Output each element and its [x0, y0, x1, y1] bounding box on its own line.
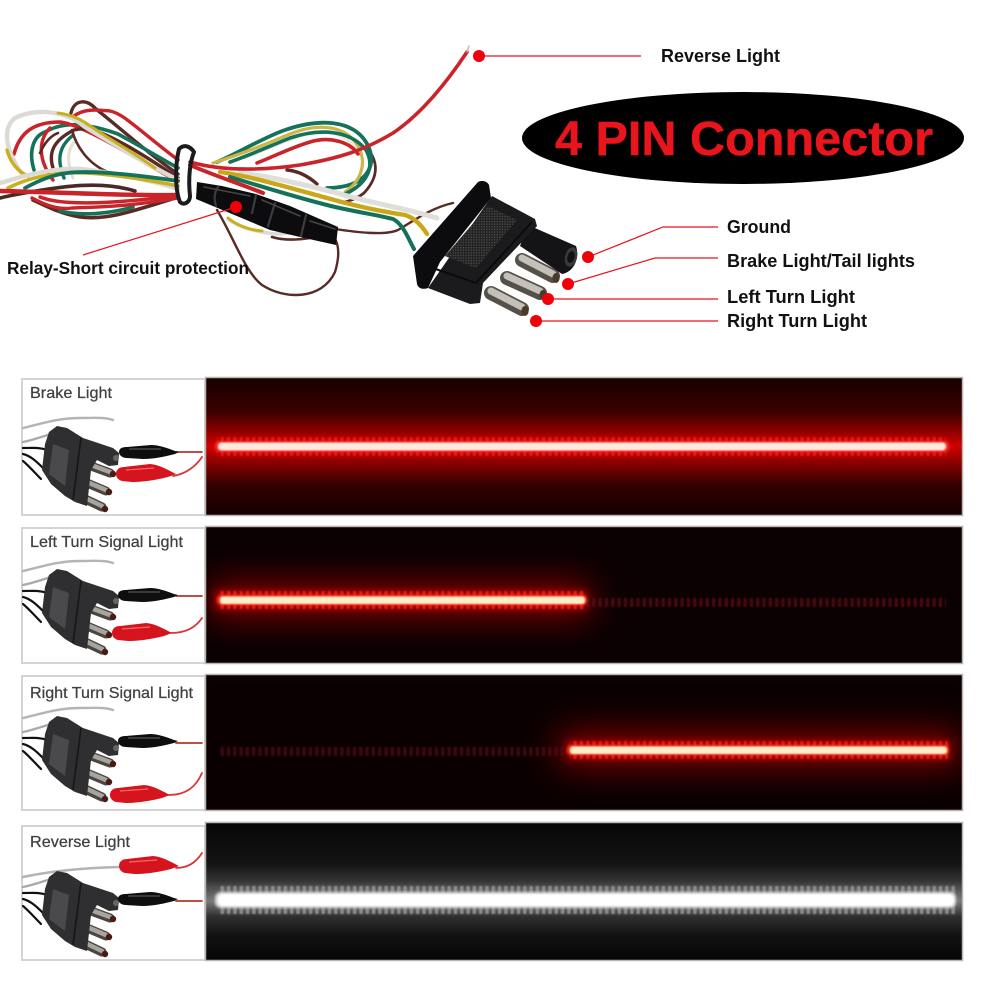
- callout: left turn light: Left Turn Light: [727, 287, 855, 307]
- panel: left turn wiring: Left Turn Signal Light: [30, 534, 184, 551]
- callout: reverse light: Reverse Light: [661, 46, 780, 66]
- panel: brake light wiring: [22, 379, 205, 515]
- panel: left turn strip: [206, 527, 962, 663]
- relay body: [196, 182, 338, 245]
- callout: relay: Relay-Short circuit protection: [7, 258, 249, 278]
- brown loop under relay: [217, 210, 338, 295]
- callout: right turn light: Right Turn Light: [727, 311, 867, 331]
- panel: right turn strip: [206, 675, 962, 810]
- socket nub: [520, 225, 577, 274]
- callout: brake and tail lights: Brake Light/Tail lights: [727, 251, 915, 271]
- callout: ground: Ground: [727, 217, 791, 237]
- product photo: wire harness: [0, 46, 469, 295]
- flange: [413, 181, 491, 289]
- callout: right turn light: [530, 311, 867, 331]
- product photo: 4 pin connector: [413, 181, 579, 316]
- panel: brake light strip: [206, 378, 962, 515]
- panel: right turn wiring: [22, 676, 205, 810]
- body: [428, 196, 537, 304]
- callout: reverse light: [473, 46, 780, 66]
- back loop wires, left: [7, 102, 178, 180]
- panel: reverse light wiring: [22, 826, 205, 960]
- panel borders: [206, 378, 962, 960]
- panel: left turn wiring: [22, 528, 205, 663]
- red wires: [190, 165, 263, 193]
- lower left bundle: [0, 169, 178, 218]
- callout: left turn light: [542, 287, 855, 307]
- right loop: [213, 123, 375, 202]
- title badge: [522, 92, 964, 184]
- panel: brake light wiring: Brake Light: [30, 385, 113, 402]
- panel: right turn wiring: Right Turn Signal Light: [30, 685, 194, 702]
- callout: ground: [582, 217, 791, 263]
- callout: brake and tail lights: [562, 251, 915, 290]
- metal pins: [491, 258, 553, 309]
- wires to connector: [220, 172, 437, 249]
- title badge: 4 PIN Connector: [555, 112, 933, 166]
- zip tie: [176, 146, 194, 204]
- textured panel: [445, 206, 517, 268]
- panel: reverse light strip: [206, 823, 962, 960]
- panel: reverse light wiring: Reverse Light: [30, 834, 131, 851]
- callout: relay: [7, 201, 249, 278]
